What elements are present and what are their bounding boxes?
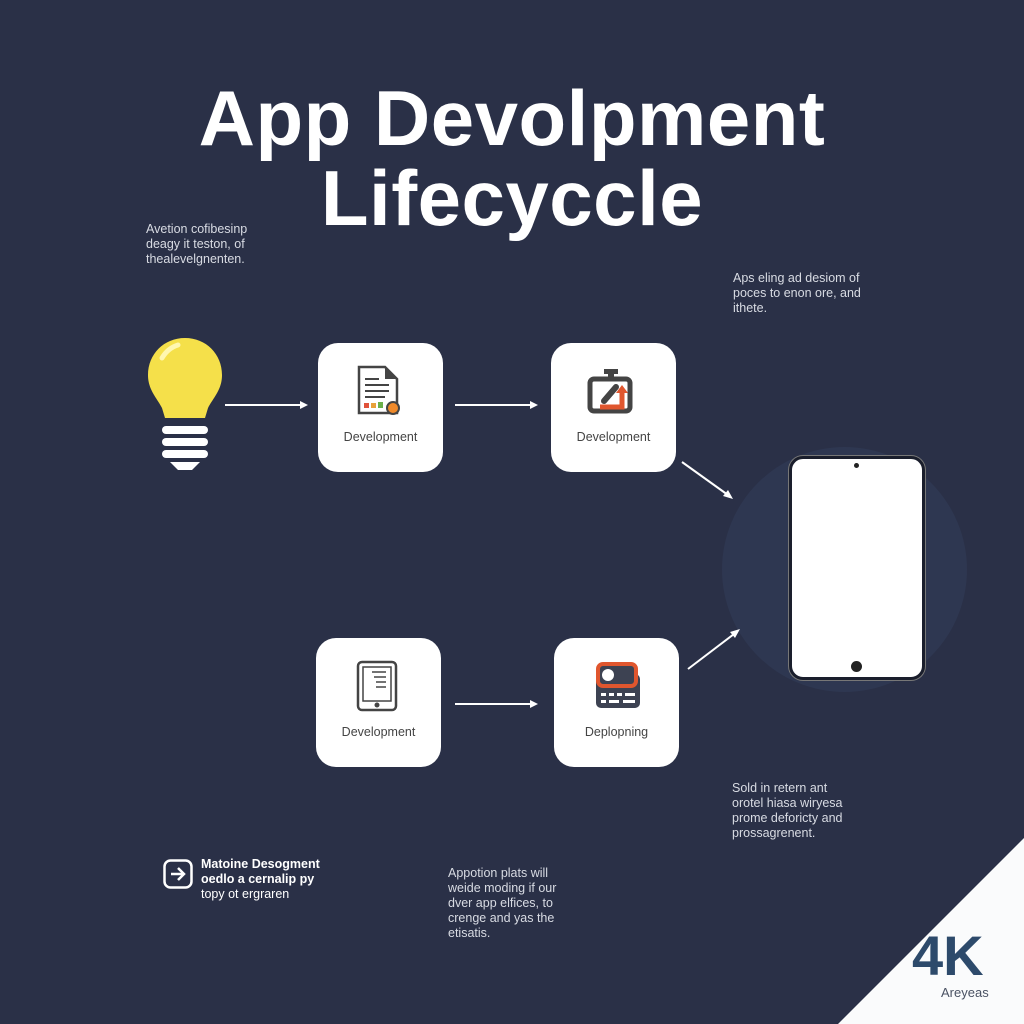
icon: deploy device	[596, 662, 640, 708]
text block: bottom middle: etisatis.	[448, 926, 490, 940]
text block: top right	[733, 271, 861, 315]
text block: bottom middle	[448, 866, 556, 940]
text block: bottom middle: crenge and yas the	[448, 911, 554, 925]
text block: top left: deagy it teston, of	[146, 237, 245, 251]
corner badge: 4K: 4K	[912, 924, 984, 987]
text block: bottom right: prossagrenent.	[732, 826, 815, 840]
text block: top right: ithete.	[733, 301, 767, 315]
icon: light bulb	[148, 338, 222, 470]
callout: bottom left with arrow icon: topy ot ergraren	[201, 887, 289, 901]
panel: step 2	[551, 343, 676, 472]
text block: bottom right: orotel hiasa wiryesa	[732, 796, 842, 810]
panel: step 2: Development	[577, 430, 650, 444]
icon: build tool	[588, 369, 632, 414]
arrow: box 4 to phone	[688, 629, 740, 670]
icon: tablet	[356, 660, 398, 712]
arrow: box 2 to phone	[682, 461, 733, 499]
callout: bottom left with arrow icon	[163, 857, 320, 901]
text block: top right: Aps eling ad desiom of	[733, 271, 859, 285]
title: App Devolpment	[199, 74, 825, 162]
text block: top right: poces to enon ore, and	[733, 286, 861, 300]
panel: step 4	[554, 638, 679, 767]
title: Lifecyccle	[321, 154, 703, 242]
icon: smartphone	[789, 456, 925, 680]
text block: bottom middle: weide moding if our	[448, 881, 556, 895]
text block: top left	[146, 222, 247, 266]
arrow: bulb to box 1	[225, 401, 308, 409]
panel: step 1: Development	[344, 430, 417, 444]
text block: bottom right	[732, 781, 842, 840]
panel: step 3: Development	[342, 725, 415, 739]
text block: bottom middle: Appotion plats will	[448, 866, 548, 880]
title	[199, 74, 825, 242]
corner badge: 4K	[838, 838, 1024, 1024]
arrow: box 1 to box 2	[455, 401, 538, 409]
text block: bottom middle: dver app elfices, to	[448, 896, 553, 910]
text block: bottom right: Sold in retern ant	[732, 781, 827, 795]
callout: bottom left with arrow icon: Matoine Desogment	[201, 857, 320, 871]
arrow: box 3 to box 4	[455, 700, 538, 708]
panel: step 4: Deplopning	[585, 725, 648, 739]
icon: document	[358, 366, 400, 415]
glow behind phone	[722, 447, 967, 692]
callout: bottom left with arrow icon: oedlo a cernalip py	[201, 872, 314, 886]
corner badge: 4K: Areyeas	[941, 985, 989, 1000]
panel: step 3	[316, 638, 441, 767]
text block: bottom right: prome deforicty and	[732, 811, 842, 825]
icon: arrow box	[163, 859, 193, 889]
text block: top left: Avetion cofibesinp	[146, 222, 247, 236]
panel: step 1	[318, 343, 443, 472]
text block: top left: thealevelgnenten.	[146, 252, 245, 266]
